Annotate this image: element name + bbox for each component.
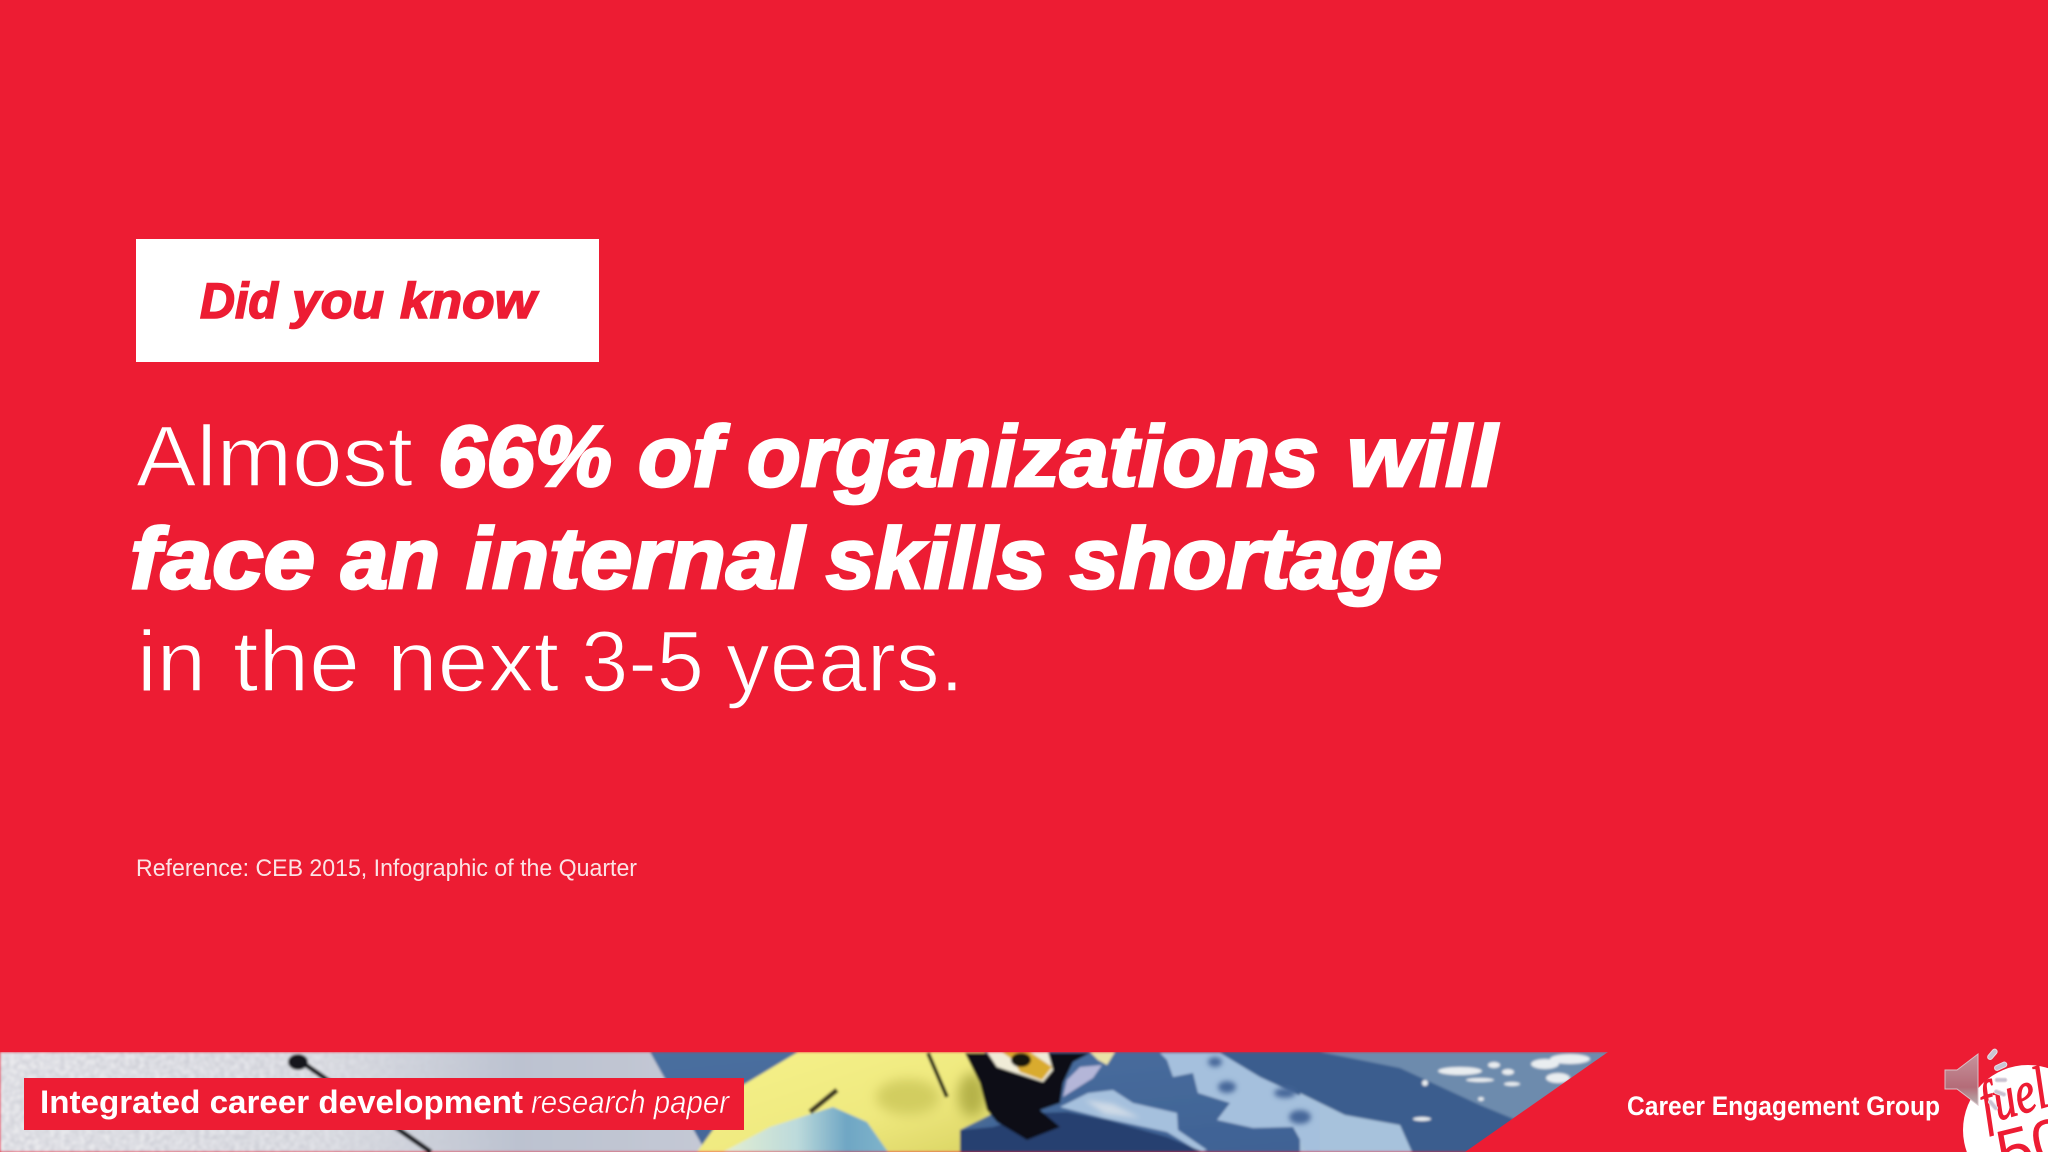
icon: audio speaker	[1945, 1048, 2008, 1111]
headline statement: will	[1347, 409, 1499, 505]
badge: Did you know: Did	[200, 273, 279, 329]
badge: Did you know	[136, 239, 599, 362]
headline statement: skills	[826, 511, 1046, 607]
badge: Did you know: know	[400, 273, 539, 329]
headline statement: 3-5	[581, 614, 704, 710]
skier jacket	[697, 1052, 1000, 1152]
label: Integrated career development research paper	[24, 1078, 744, 1130]
label: Integrated career development research paper: research paper	[531, 1084, 730, 1120]
company name: Career Engagement Group: Career Engagement Group	[1627, 1091, 1940, 1121]
headline statement: the	[233, 614, 360, 710]
headline statement: shortage	[1070, 511, 1442, 607]
headline statement: 66%	[438, 409, 612, 505]
photo strip: skier on a snowy mountain	[0, 1052, 1620, 1152]
snow patches on the far slope	[1060, 1053, 1320, 1152]
headline statement	[130, 409, 1499, 710]
headline statement: Almost	[136, 409, 413, 505]
skier helmet	[965, 1053, 1090, 1140]
headline statement: years.	[726, 614, 964, 710]
headline statement: face	[130, 511, 315, 607]
ski pole	[306, 1065, 431, 1152]
badge: Did you know: you	[289, 273, 384, 329]
label: Integrated career development research paper: Integrated career development	[40, 1084, 523, 1120]
headline statement: internal	[466, 511, 806, 607]
headline statement: in	[137, 614, 206, 710]
headline statement: organizations	[747, 409, 1319, 505]
headline statement: next	[387, 614, 559, 710]
headline statement: of	[638, 409, 730, 505]
headline statement: an	[341, 511, 440, 607]
reference note: Reference: CEB 2015, Infographic of the Quarter	[136, 855, 637, 882]
